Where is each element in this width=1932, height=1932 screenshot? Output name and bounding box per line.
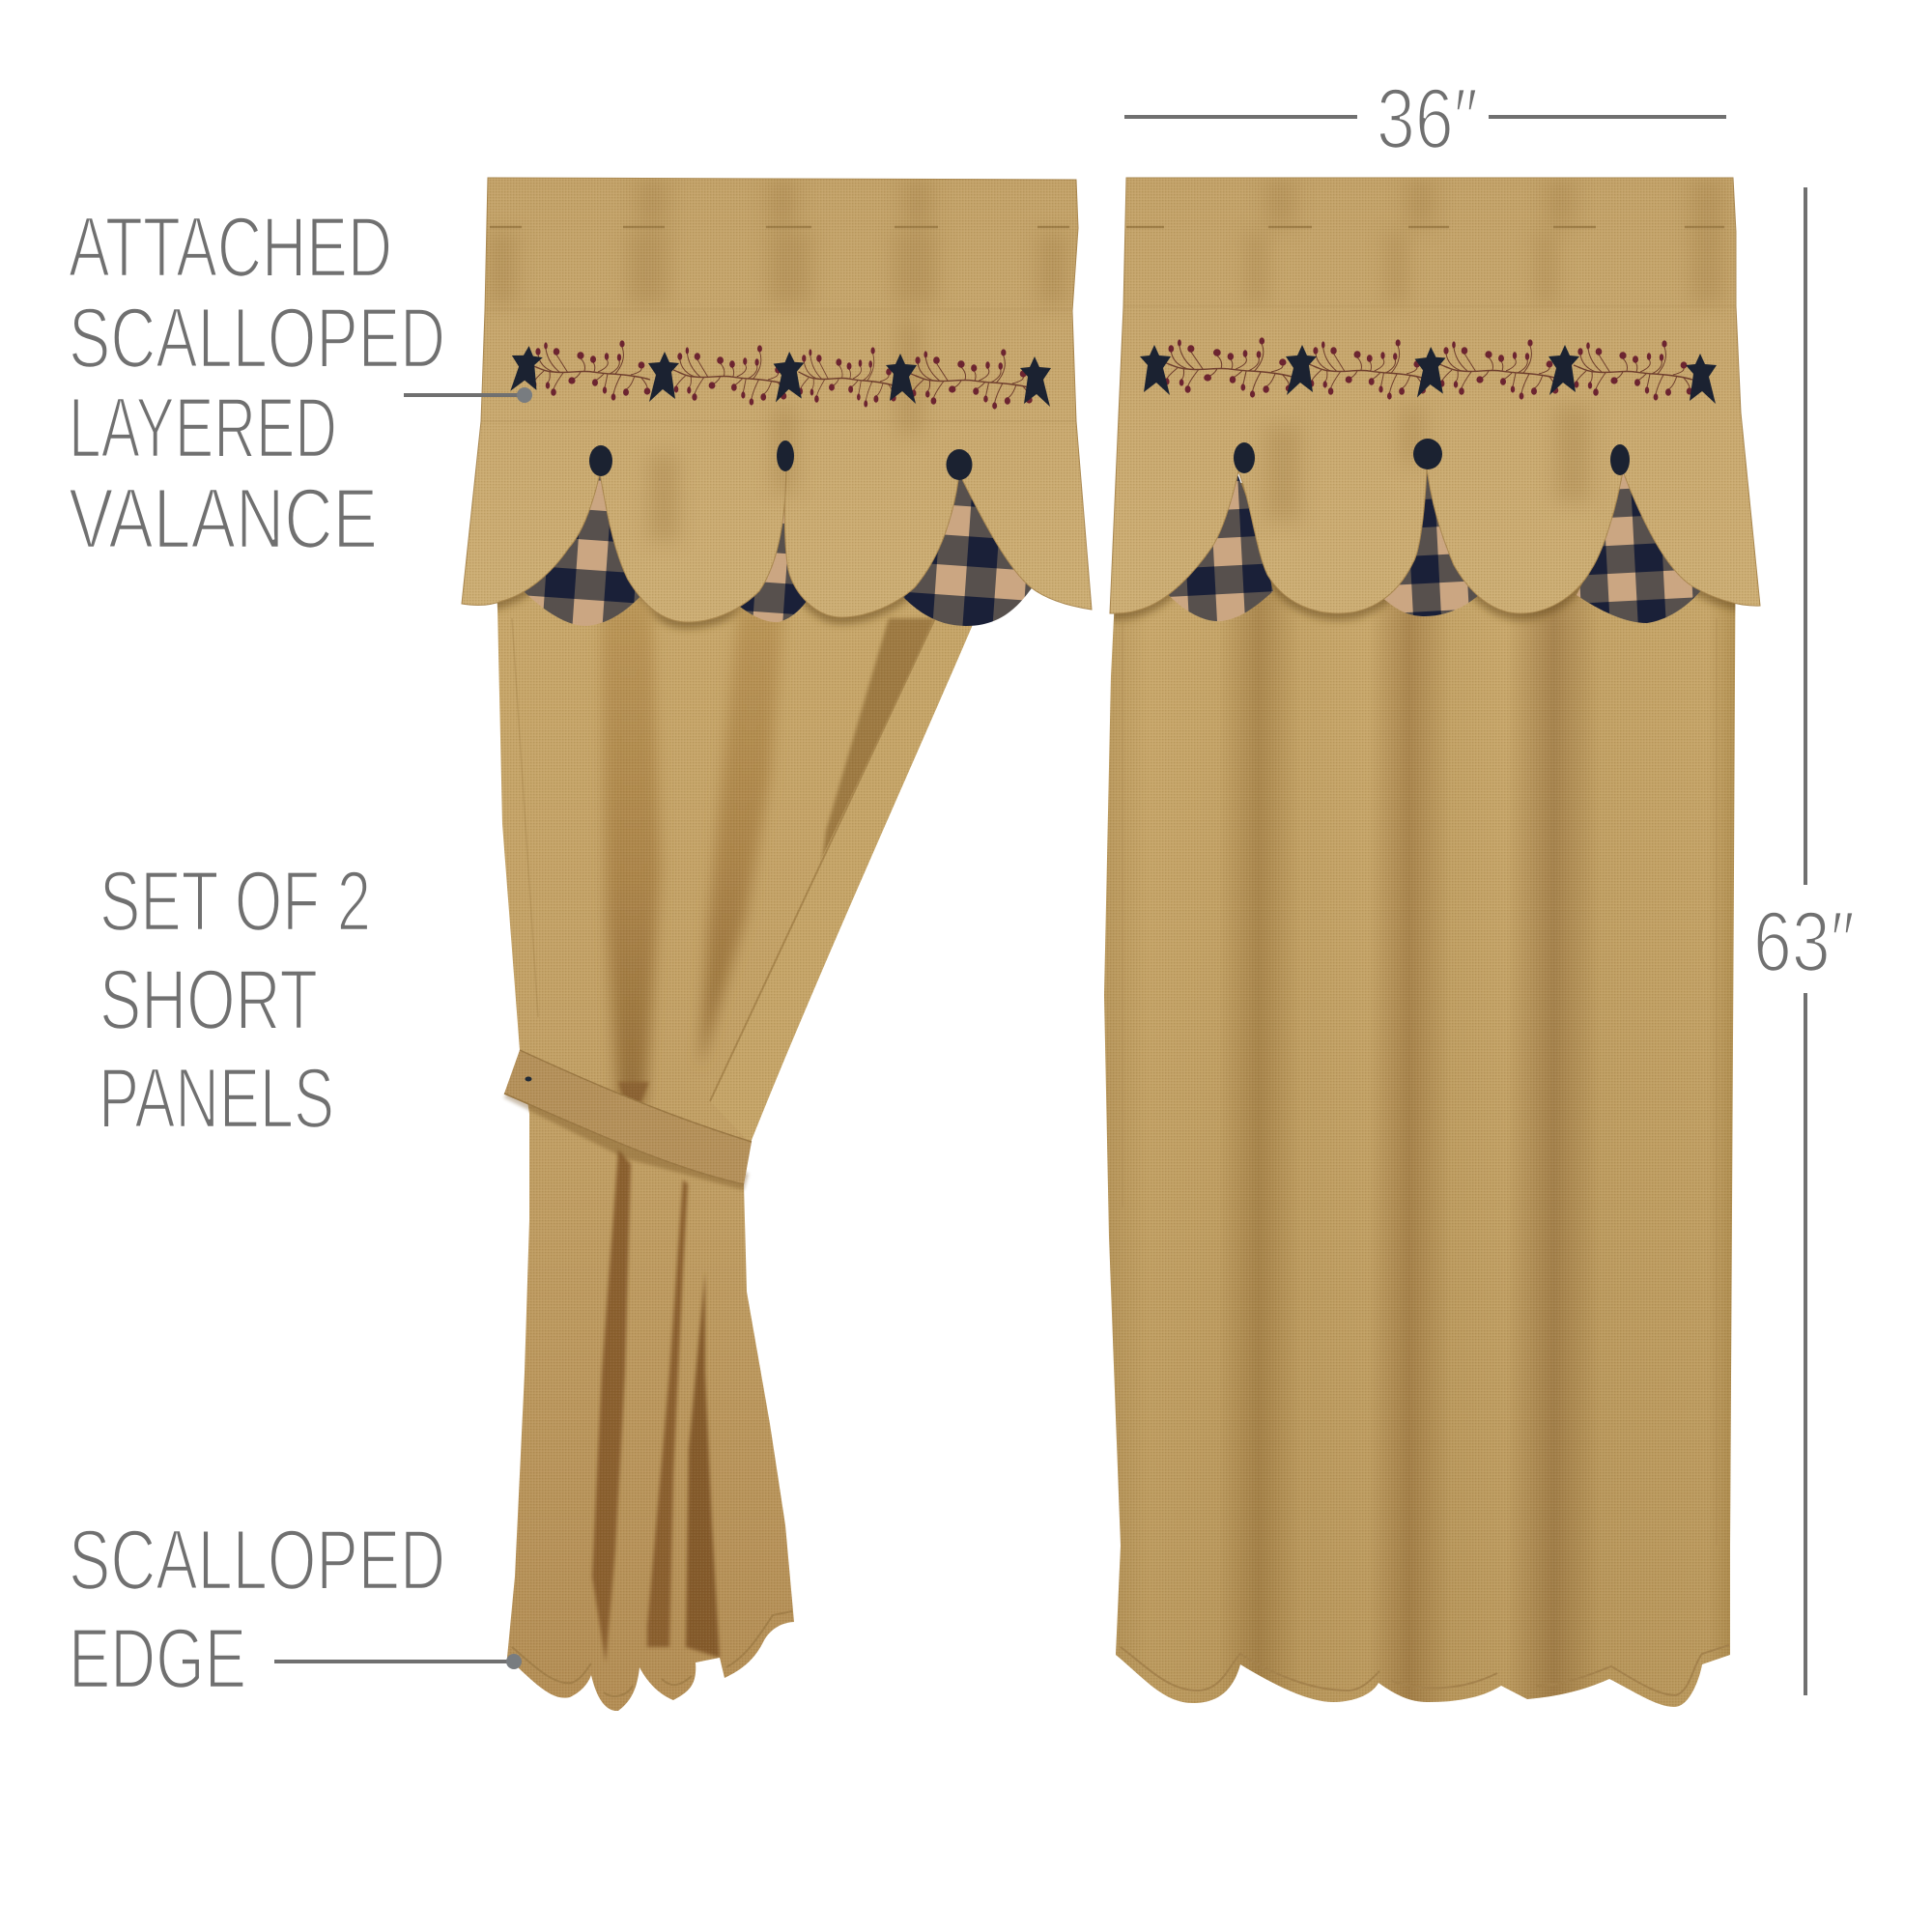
label: set of 2 short panels [99, 853, 371, 1146]
label: scalloped edge [69, 1512, 445, 1706]
label: scalloped edge: SCALLOPED [69, 1512, 445, 1607]
panel: right curtain hanging flat [1101, 174, 1768, 1707]
label: attached scalloped layered valance: VALANCE [69, 470, 378, 566]
right scalloped valance [1101, 174, 1768, 628]
left valance embroidered vine [531, 340, 1033, 410]
tieback strap [503, 1050, 752, 1190]
right valance stars [1140, 345, 1717, 404]
right valance embroidered vine [1164, 337, 1692, 401]
dimension: width 36 inches [1124, 71, 1726, 166]
right valance buttons [1234, 439, 1630, 475]
label: attached scalloped layered valance [69, 199, 445, 566]
gingham lining pieces, right curtain [1159, 469, 1702, 623]
gingham lining pieces, left curtain [522, 469, 1034, 626]
pointer: scalloped edge [274, 1654, 522, 1669]
left curtain body [497, 591, 972, 1711]
label: set of 2 short panels: PANELS [99, 1050, 334, 1146]
left scalloped valance [454, 174, 1101, 628]
label: set of 2 short panels: SET OF 2 [99, 853, 371, 949]
label: attached scalloped layered valance: ATTACHED [69, 199, 392, 295]
right curtain body [1104, 483, 1735, 1707]
label: set of 2 short panels: SHORT [99, 952, 318, 1047]
label: attached scalloped layered valance: LAYERED [69, 380, 337, 475]
dimension: length 63 inches [1753, 187, 1855, 1695]
dimension: width 36 inches: 36″ [1377, 71, 1478, 166]
label: attached scalloped layered valance: SCALLOPED [69, 290, 445, 385]
panel: left curtain tied back [454, 174, 1101, 1719]
dimension: length 63 inches: 63″ [1753, 894, 1855, 989]
pointer: valance [404, 387, 532, 403]
left valance stars [509, 345, 1051, 407]
left valance buttons [589, 440, 972, 480]
label: scalloped edge: EDGE [69, 1610, 246, 1706]
